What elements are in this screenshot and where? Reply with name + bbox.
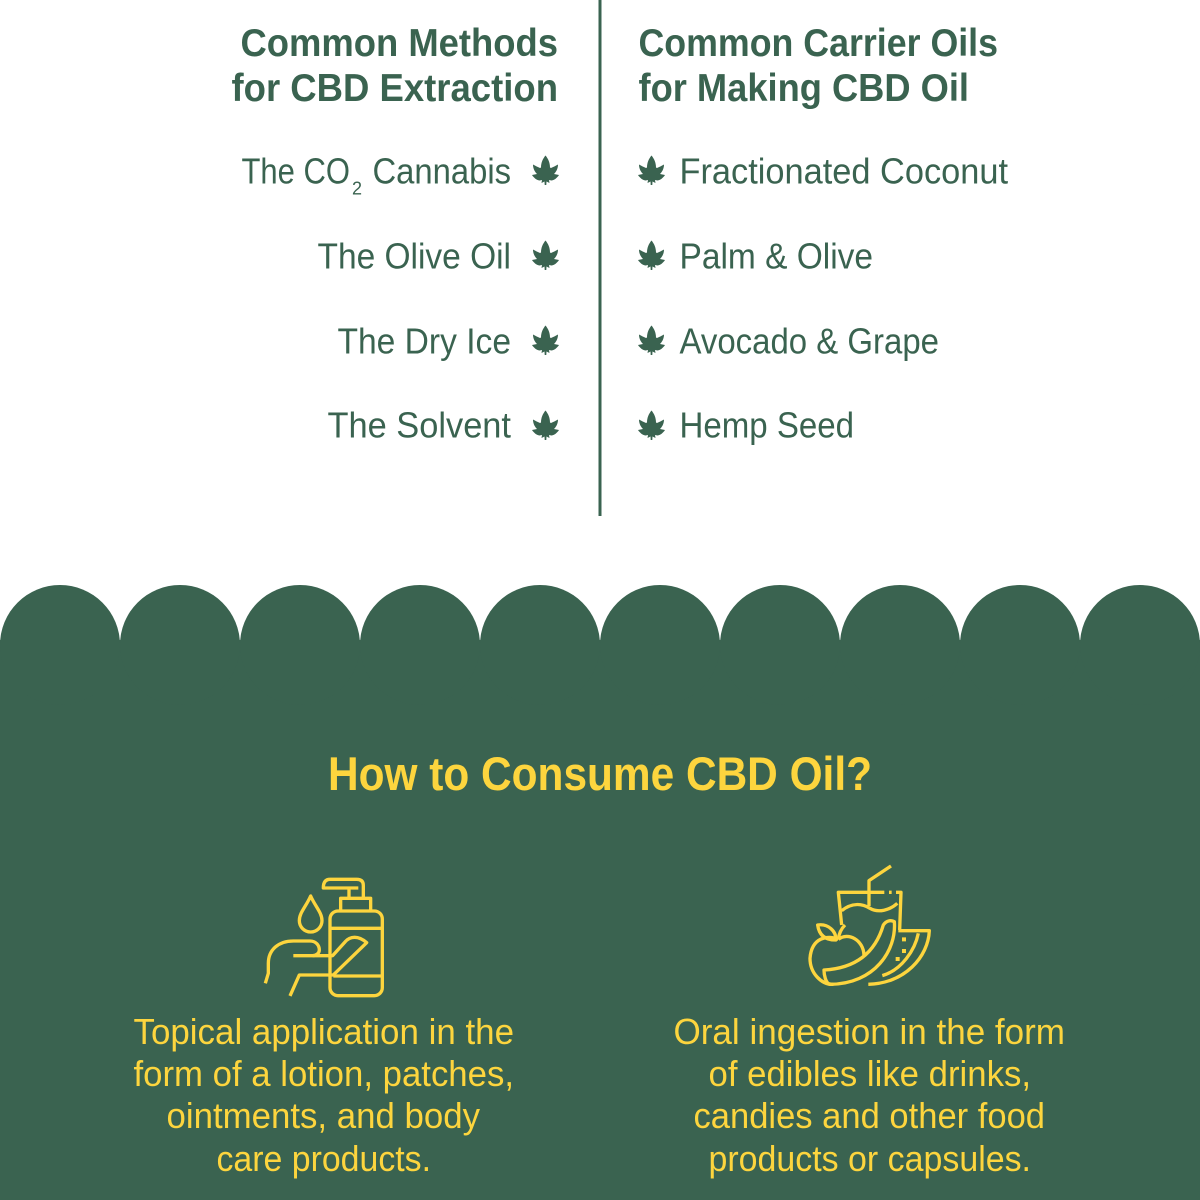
heading: extraction methods	[232, 22, 558, 110]
icon: lotion bottle and hand	[265, 879, 382, 996]
item: avocado and grape: Avocado & Grape	[680, 320, 939, 362]
icon: leaf	[532, 156, 559, 185]
item: hemp seed: Hemp Seed	[680, 404, 854, 446]
icon: leaf	[532, 240, 559, 270]
icon: drink and fruits	[810, 866, 929, 984]
text: oral ingestion: of edibles like drinks,	[708, 1053, 1031, 1094]
icon: leaf	[638, 410, 665, 440]
icon: leaf	[532, 326, 559, 355]
text: topical application	[134, 1011, 514, 1179]
center divider	[598, 0, 602, 516]
text: oral ingestion: candies and other food	[694, 1095, 1045, 1136]
text: oral ingestion: Oral ingestion in the form	[674, 1011, 1065, 1052]
icon: leaf	[532, 410, 559, 440]
text: topical application: form of a lotion, patches,	[134, 1053, 514, 1094]
item: dry ice: The Dry Ice	[338, 320, 511, 362]
heading: carrier oils: for Making CBD Oil	[638, 67, 969, 110]
heading: extraction methods: Common Methods	[240, 22, 558, 65]
icon: leaf	[638, 326, 665, 355]
panel: extraction methods	[232, 22, 559, 446]
panel: carrier oils	[638, 22, 1008, 446]
heading: extraction methods: for CBD Extraction	[232, 67, 558, 110]
heading: carrier oils: Common Carrier Oils	[638, 22, 998, 65]
item: fractionated coconut: Fractionated Coconut	[680, 150, 1008, 192]
text: topical application: care products.	[216, 1138, 431, 1179]
text: oral ingestion: products or capsules.	[708, 1138, 1031, 1179]
item: CO2 cannabis: Cannabis	[372, 150, 511, 192]
item: CO2 cannabis: The CO	[242, 150, 350, 192]
item: olive oil: The Olive Oil	[318, 236, 511, 276]
icon: leaf	[638, 156, 665, 185]
title: how to consume: How to Consume CBD Oil?	[328, 747, 872, 800]
item: CO2 cannabis	[242, 150, 511, 198]
item: CO2 cannabis: 2	[352, 178, 362, 198]
text: oral ingestion	[674, 1011, 1065, 1179]
panel: green scalloped background	[0, 585, 1200, 1200]
item: solvent: The Solvent	[328, 404, 511, 446]
heading: carrier oils	[638, 22, 998, 110]
item: palm and olive: Palm & Olive	[680, 236, 873, 276]
text: topical application: Topical application in the	[134, 1011, 514, 1052]
icon: leaf	[638, 240, 665, 270]
text: topical application: ointments, and body	[166, 1095, 480, 1136]
